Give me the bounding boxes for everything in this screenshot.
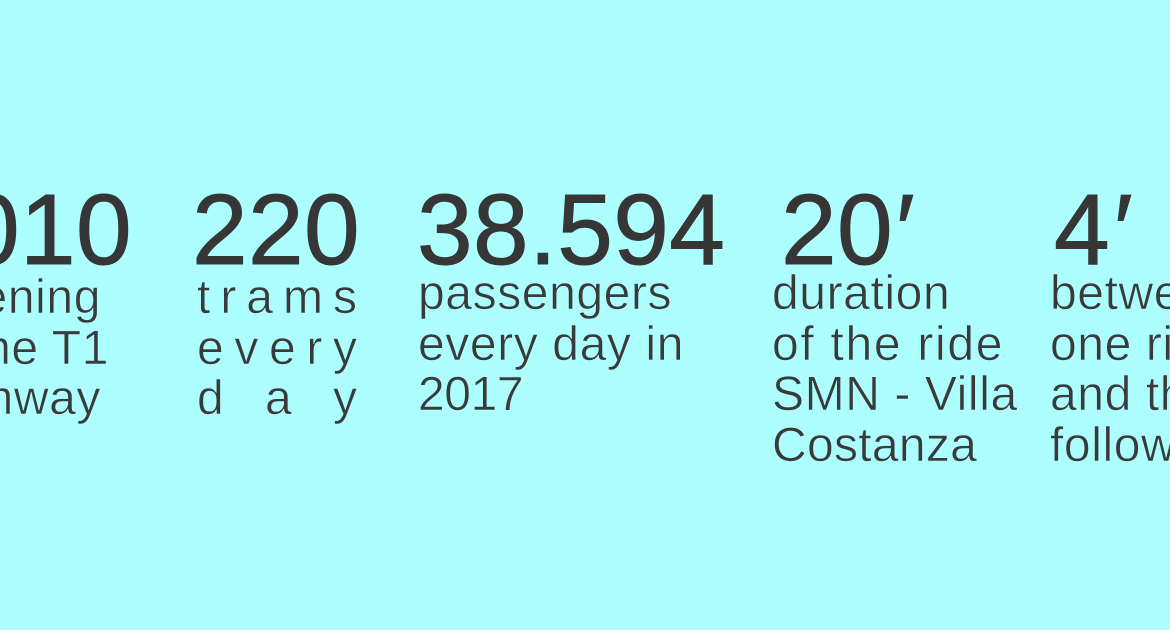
text: trams every day: v: [234, 322, 258, 374]
stat: 20 minute ride: [772, 174, 1018, 472]
text: passengers every day in 2017: every day in: [418, 318, 684, 370]
text: trams every day: e: [269, 322, 296, 374]
text: trams every day: a: [246, 271, 273, 324]
text: duration of the ride SMN - Villa Costanza: [772, 267, 1018, 472]
text: duration of the ride SMN - Villa Costanza: Costanza: [772, 418, 977, 472]
stat: 220 trams: [192, 174, 360, 425]
stat: 4 minute frequency: [1050, 178, 1170, 470]
text: passengers every day in 2017: [418, 267, 684, 421]
text: trams every day: d: [197, 372, 224, 425]
number: 38.594: 38.594: [417, 174, 725, 286]
text: trams every day: e: [197, 322, 224, 374]
text: trams every day: y: [333, 372, 357, 425]
text: trams every day: s: [333, 271, 357, 324]
text: trams every day: m: [283, 271, 323, 324]
text: trams every day: t: [197, 271, 210, 324]
stat: 2010 opening year: [0, 178, 132, 425]
text: trams every day: r: [306, 322, 322, 374]
text: trams every day: [197, 271, 357, 425]
text: passengers every day in 2017: 2017: [418, 368, 523, 421]
stat: 38.594 passengers: [417, 174, 725, 421]
text: duration of the ride SMN - Villa Costanza: SMN - Villa: [772, 368, 1018, 421]
number: 20': 20′: [781, 174, 915, 286]
text: duration of the ride SMN - Villa Costanza: of the ride: [772, 318, 1004, 370]
text: passengers every day in 2017: passengers: [418, 267, 672, 320]
text: trams every day: a: [265, 372, 292, 425]
text: trams every day: y: [333, 322, 357, 374]
text: between one ride and the following: [1050, 267, 1170, 470]
text: duration of the ride SMN - Villa Costanza: duration: [772, 267, 950, 320]
number: 220: 220: [192, 174, 360, 286]
text: trams every day: r: [220, 271, 236, 324]
